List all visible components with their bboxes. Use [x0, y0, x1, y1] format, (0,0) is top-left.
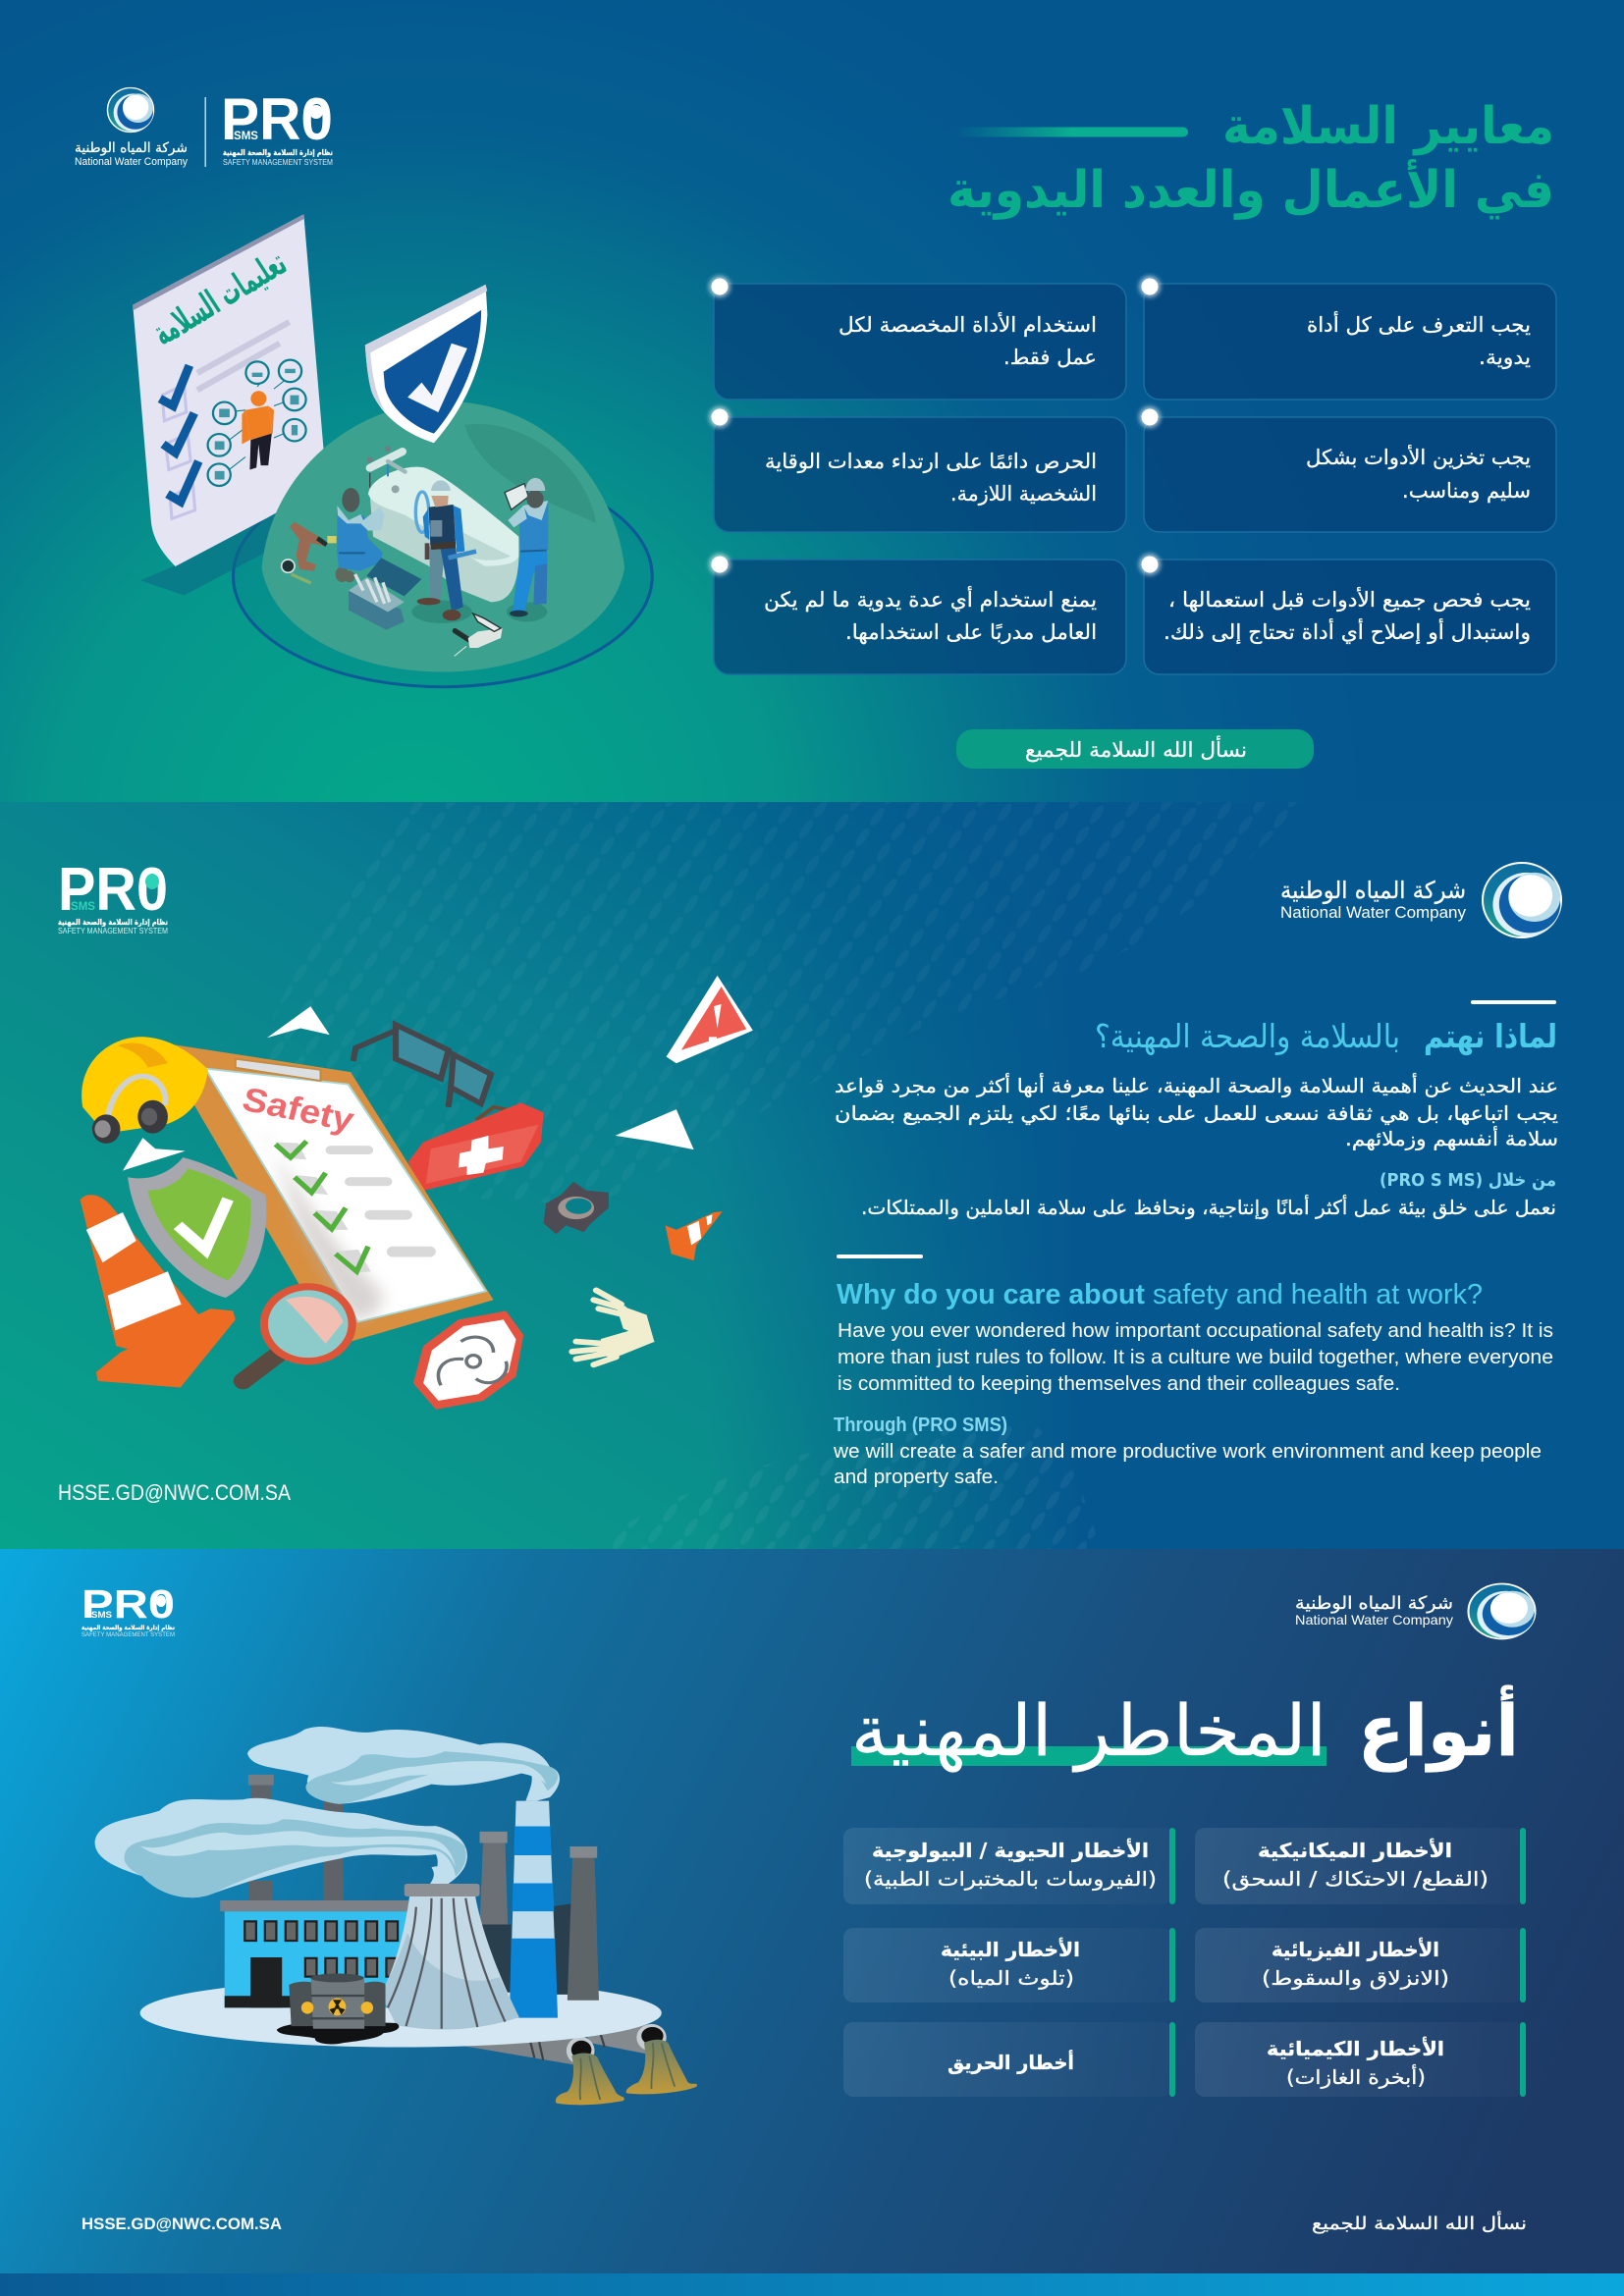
logo: PRO SMS: SAFETY MANAGEMENT SYSTEM [81, 1632, 175, 1638]
logo: PRO SMS: SMS [71, 899, 95, 913]
cooling tower [381, 1866, 519, 2029]
icon: paper plane right [616, 1109, 694, 1149]
icon: toolbox [349, 558, 421, 630]
logo: National Water Company: National Water Company [1280, 903, 1466, 922]
text: arabic through PRO SMS: من خلال (PRO S MS) [1380, 1170, 1556, 1191]
smoke: lower plume [95, 1798, 467, 1897]
card: mechanical hazards: (القطع/ الاحتكاك / السحق) [1222, 1867, 1489, 1891]
card: mechanical hazards [1195, 1828, 1526, 1904]
logo: National Water Company and PRO SMS: نظام إدارة السلامة والصحة المهنية [223, 148, 333, 157]
panel: why we care about safety [0, 802, 1624, 1549]
closing pill [956, 729, 1314, 769]
title [851, 1684, 1519, 1773]
icon: magnifying glass [243, 1287, 352, 1381]
card: environmental hazards [843, 1928, 1175, 2002]
card: wear protective equipment: الحرص دائمًا على ارتداء معدات الوقاية [765, 450, 1097, 473]
text: arabic paragraph: سلامة أنفسهم وزملائهم. [1345, 1126, 1558, 1150]
title: المخاطر المهنية [851, 1689, 1326, 1773]
card: chemical hazards: الأخطار الكيميائية [1267, 2036, 1444, 2060]
icon: instruction sheet: تعليمات السلامة [145, 242, 294, 353]
closing pill: نسأل الله السلامة للجميع [1025, 735, 1247, 762]
logo: National Water Company [1280, 863, 1561, 937]
icon: gloves [572, 1290, 654, 1364]
text: english paragraph: Have you ever wondered how important occupational safety and health is? It is [838, 1319, 1553, 1342]
text: english paragraph [838, 1319, 1553, 1395]
card: fire hazards [843, 2022, 1175, 2097]
icon: traffic cone [81, 1195, 236, 1388]
title: في الأعمال والعدد اليدوية [947, 158, 1554, 220]
card: store tools properly: سليم ومناسب. [1402, 479, 1531, 504]
heading: arabic why we care: لماذا نهتم [1424, 1017, 1557, 1056]
text: arabic paragraph: عند الحديث عن أهمية السلامة والصحة المهنية، علينا معرفة أنها أكثر من مجرد قواعد [835, 1073, 1558, 1097]
card: biological hazards: الأخطار الحيوية / البيولوجية [872, 1838, 1149, 1862]
logo: National Water Company and PRO SMS [75, 86, 333, 168]
logo: National Water Company and PRO SMS: SAFETY MANAGEMENT SYSTEM [223, 158, 333, 167]
logo: National Water Company: National Water Company [1295, 1612, 1453, 1628]
card: use the right tool: استخدام الأداة المخصصة لكل [839, 312, 1097, 337]
heading: english why do you care: safety and health at work? [1153, 1279, 1483, 1310]
text: english through PRO SMS: and property safe. [834, 1466, 999, 1488]
text: english through PRO SMS: Through (PRO SMS) [834, 1414, 1007, 1436]
card: inspect tools before use: يجب فحص جميع الأدوات قبل استعمالها ، [1168, 587, 1531, 612]
text: email: HSSE.GD@NWC.COM.SA [81, 2215, 282, 2233]
icon: clipboard: Safety [239, 1080, 358, 1139]
title accent bar [956, 128, 1188, 137]
card: chemical hazards [1195, 2022, 1526, 2097]
striped chimney [510, 1801, 558, 2018]
card: use the right tool: عمل فقط. [1003, 346, 1097, 369]
icon: first aid kit [408, 1102, 544, 1192]
logo: National Water Company and PRO SMS: National Water Company [75, 156, 188, 168]
icon: power drill [455, 614, 503, 656]
illustration: kneeling worker [336, 488, 385, 582]
logo: PRO SMS: PR0 [81, 1581, 175, 1627]
panel: hand tool safety standards [0, 0, 1624, 802]
logo: PRO SMS: SMS [91, 1610, 112, 1620]
card: environmental hazards: الأخطار البيئية [941, 1937, 1080, 1961]
radioactive barrels [289, 1974, 386, 2029]
icon: instruction sheet [133, 214, 327, 566]
icon: paper plane top [267, 1006, 330, 1038]
card: identify every tool: يدوية. [1479, 346, 1531, 369]
illustration: safety clipboard and equipment [81, 976, 753, 1410]
logo: PRO SMS: PR0 [58, 856, 168, 924]
drainage pipes [445, 2024, 697, 2105]
back chimneys [248, 1775, 344, 1902]
card: wear protective equipment: الشخصية اللازمة. [950, 482, 1097, 506]
logo: National Water Company and PRO SMS: PR0 [221, 86, 333, 152]
logo: National Water Company: شركة المياه الوطنية [1280, 877, 1466, 904]
card: inspect tools before use [1139, 554, 1556, 674]
card: trained workers only: العامل مدربًا على استخدامها. [845, 620, 1097, 644]
icon: dome [262, 401, 624, 672]
icon: safety glasses [353, 1025, 491, 1107]
factory building [220, 1900, 408, 2007]
illustration: safety instructions sheet and workers under dome [133, 214, 652, 687]
illustration: bathtub [367, 446, 519, 602]
card: mechanical hazards: الأخطار الميكانيكية [1258, 1838, 1452, 1862]
text: arabic through PRO SMS [861, 1170, 1556, 1220]
icon: gear [544, 1182, 609, 1234]
icon: shield with check mark [365, 285, 487, 443]
card: biological hazards [843, 1828, 1175, 1904]
ground [140, 1979, 662, 2048]
icon: hard hat and ear defenders [81, 1037, 208, 1144]
text: english paragraph: more than just rules to follow. It is a culture we build together, where everyone [838, 1346, 1553, 1368]
icon: green shield [128, 1157, 266, 1298]
card: identify every tool: يجب التعرف على كل أداة [1307, 311, 1531, 337]
text: english through PRO SMS [833, 1414, 1542, 1488]
title [947, 97, 1554, 220]
text: arabic paragraph [835, 1073, 1558, 1150]
icon: warning triangle [667, 976, 753, 1063]
text: arabic paragraph: يجب اتباعها، بل هي ثقافة نسعى للعمل على بنائها معًا؛ لكي يلتزم الجميع بضمان [835, 1101, 1558, 1126]
card: environmental hazards: (تلوث المياه) [948, 1966, 1074, 1990]
card: fire hazards: أخطار الحريق [947, 2049, 1074, 2074]
logo: National Water Company and PRO SMS: SMS [234, 129, 258, 142]
icon: biohazard sign [413, 1310, 523, 1410]
logo: National Water Company [1295, 1584, 1536, 1639]
card: store tools properly [1139, 406, 1556, 532]
icon: cordless drill [282, 522, 337, 583]
logo: National Water Company and PRO SMS: شركة المياه الوطنية [75, 140, 188, 156]
heading: arabic why we care: بالسلامة والصحة المهنية؟ [1095, 1017, 1400, 1055]
heading: english why do you care [837, 1279, 1483, 1310]
logo: PRO SMS [81, 1581, 175, 1638]
logo: PRO SMS: نظام إدارة السلامة والصحة المهنية [58, 918, 168, 927]
divider: english section [837, 1255, 923, 1258]
icon: small cone [666, 1211, 723, 1260]
panel: types of occupational hazards [0, 1549, 1624, 2296]
card: store tools properly: يجب تخزين الأدوات بشكل [1306, 445, 1531, 469]
text: arabic through PRO SMS: نعمل على خلق بيئة عمل أكثر أمانًا وإنتاجية، ونحافظ على سلامة العاملين والممتلكات. [861, 1195, 1556, 1220]
oil spill [277, 2022, 399, 2044]
card: trained workers only [709, 554, 1126, 674]
card: use the right tool [709, 276, 1126, 400]
card: trained workers only: يمنع استخدام أي عدة يدوية ما لم يكن [764, 586, 1097, 613]
icon: paper plane left [123, 1138, 186, 1171]
text: email: HSSE.GD@NWC.COM.SA [58, 1480, 291, 1505]
heading: english why do you care: Why do you care about [837, 1279, 1145, 1310]
text: english paragraph: is committed to keeping themselves and their colleagues safe. [838, 1372, 1400, 1395]
text: closing line: نسأل الله السلامة للجميع [1312, 2211, 1527, 2234]
illustration: right worker with clipboard [505, 478, 548, 616]
icon: clipboard [176, 1044, 494, 1342]
text: english through PRO SMS: we will create a safer and more productive work environment and keep people [833, 1440, 1542, 1463]
card: identify every tool [1139, 276, 1556, 400]
logo: PRO SMS: نظام إدارة السلامة والصحة المهنية [81, 1625, 175, 1631]
card: inspect tools before use: واستبدال أو إصلاح أي أداة تحتاج إلى ذلك. [1164, 618, 1531, 645]
logo: PRO SMS: SAFETY MANAGEMENT SYSTEM [58, 927, 168, 935]
right chimneys and dark building [480, 1832, 599, 2001]
title: أنواع [1358, 1684, 1519, 1773]
illustration: centre worker [415, 480, 476, 620]
card: physical hazards: (الانزلاق والسقوط) [1262, 1966, 1449, 1990]
logo: National Water Company: شركة المياه الوطنية [1295, 1593, 1453, 1614]
card: wear protective equipment [709, 406, 1126, 532]
title: معايير السلامة [1222, 97, 1554, 156]
card: physical hazards [1195, 1928, 1526, 2002]
card: chemical hazards: (أبخرة الغازات) [1286, 2064, 1426, 2089]
card: biological hazards: (الفيروسات بالمختبرات الطبية) [864, 1867, 1157, 1891]
card: physical hazards: الأخطار الفيزيائية [1272, 1937, 1439, 1961]
divider: arabic section [1471, 1000, 1556, 1004]
illustration: polluting factory [95, 1727, 697, 2105]
smoke: upper plume [247, 1727, 560, 1804]
